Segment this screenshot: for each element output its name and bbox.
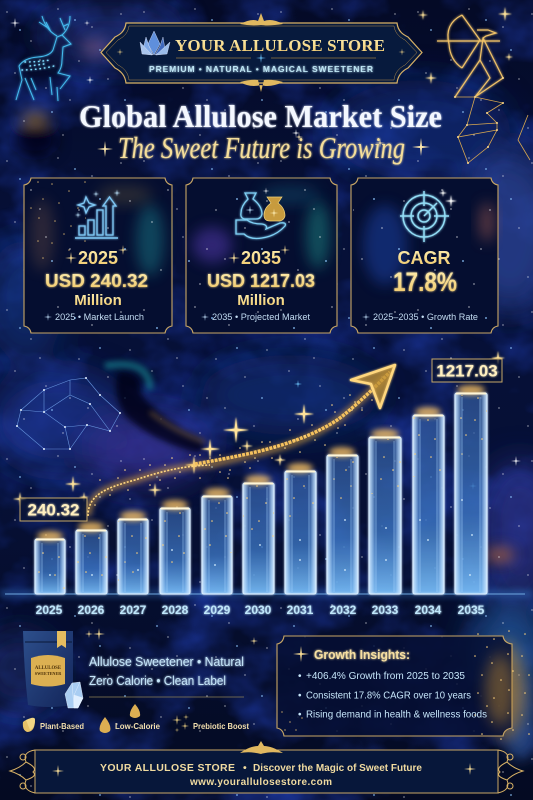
bar: 2029 bbox=[202, 488, 232, 594]
ornament: right scroll bbox=[498, 750, 523, 793]
year labels: 2026 bbox=[78, 603, 105, 617]
label: 240.32: 240.32 bbox=[28, 500, 80, 520]
ornament: bottom flourish bbox=[240, 80, 283, 92]
badge: prebiotic boost bbox=[172, 714, 249, 732]
bar: 2034 bbox=[413, 407, 444, 594]
bar: 2031 bbox=[285, 463, 316, 594]
bar: 2028 bbox=[160, 500, 190, 594]
insight bullets bbox=[298, 671, 487, 720]
badge: low-calorie: Low-Calorie bbox=[115, 721, 160, 731]
insight bullets: • bbox=[298, 690, 302, 702]
panel: 2025 market size bbox=[24, 178, 172, 333]
insight bullets: • bbox=[298, 671, 302, 682]
icon: archer constellation bbox=[437, 15, 530, 163]
year labels: 2034 bbox=[415, 603, 442, 617]
bar: 2027 bbox=[118, 511, 148, 594]
ribbon bbox=[57, 631, 66, 648]
badge: plant-based: Plant-Based bbox=[40, 721, 84, 731]
sparkle stars bbox=[10, 18, 521, 490]
icon: deer constellation bbox=[16, 16, 71, 101]
bar: 2033 bbox=[369, 429, 401, 594]
tagline: PREMIUM • NATURAL • MAGICAL SWEETENER bbox=[149, 64, 373, 74]
pouch label: SWEETENER bbox=[35, 671, 62, 676]
bar: 2032 bbox=[327, 447, 358, 594]
icon: money bags in hand bbox=[236, 188, 285, 238]
chart: market size bars 2025–2035 bbox=[0, 385, 533, 617]
year labels: 2028 bbox=[162, 603, 189, 617]
arrow: golden growth trend bbox=[88, 365, 395, 516]
ornament: top flourish bbox=[240, 741, 283, 754]
year labels: 2027 bbox=[120, 603, 147, 617]
pouch label: ALLULOSE bbox=[35, 666, 61, 671]
year labels: 2032 bbox=[330, 603, 357, 617]
panel: CAGR bbox=[351, 178, 498, 333]
value: 17.8%: 17.8% bbox=[393, 267, 457, 297]
caption: 2035 • Projected Market bbox=[212, 312, 311, 322]
icon: sparkle bbox=[293, 646, 309, 662]
icon: rising bars bbox=[75, 190, 120, 238]
text block: product attributes: Zero Calorie • Clean Label bbox=[89, 674, 226, 688]
badge: low-calorie bbox=[100, 704, 160, 733]
bar: 2030 bbox=[243, 475, 274, 594]
chart axis bbox=[0, 589, 533, 598]
insight bullets: • bbox=[298, 710, 302, 720]
footer tagline bbox=[100, 762, 422, 774]
nebula cloud and net constellation bbox=[17, 364, 205, 452]
text block: product attributes bbox=[89, 655, 244, 688]
year labels bbox=[36, 603, 485, 617]
icon: crystal bbox=[65, 682, 83, 708]
year labels: 2025 bbox=[36, 603, 63, 617]
ornament: left scroll bbox=[10, 750, 35, 793]
year labels: 2035 bbox=[458, 603, 485, 617]
icon: crystal logo bbox=[140, 31, 170, 55]
bar: 2025 bbox=[35, 531, 65, 594]
footer tagline: YOUR ALLULOSE STORE bbox=[100, 762, 235, 774]
label: year: 2035 bbox=[241, 248, 281, 268]
footer url: www.yourallulosestore.com bbox=[189, 777, 332, 788]
label: year: 2025 bbox=[78, 248, 118, 268]
badge: prebiotic boost: Prebiotic Boost bbox=[193, 721, 249, 731]
caption: 2025 • Market Launch bbox=[55, 312, 144, 322]
feature badges bbox=[23, 704, 249, 733]
icon: target bbox=[400, 189, 457, 242]
panel: growth insights bbox=[277, 628, 533, 740]
heading: store name: YOUR ALLULOSE STORE bbox=[175, 36, 385, 55]
year labels: 2031 bbox=[287, 603, 314, 617]
text block: product attributes: Allulose Sweetener • Natural bbox=[89, 655, 244, 669]
year labels: 2029 bbox=[204, 603, 231, 617]
year labels: 2030 bbox=[245, 603, 272, 617]
label: 1217.03: 1217.03 bbox=[436, 362, 498, 380]
label: unit: Million bbox=[74, 292, 122, 309]
ornament: top flourish bbox=[240, 13, 283, 25]
footer tagline: Discover the Magic of Sweet Future bbox=[253, 762, 422, 774]
badge: plant-based bbox=[23, 718, 84, 732]
header plaque bbox=[101, 13, 422, 92]
subtitle: The Sweet Future is Growing bbox=[118, 130, 405, 165]
year labels: 2033 bbox=[372, 603, 399, 617]
label: 240.32 bbox=[20, 498, 87, 521]
insight bullets: +406.4% Growth from 2025 to 2035 bbox=[306, 671, 465, 682]
bar: 2026 bbox=[76, 522, 107, 594]
footer tagline: • bbox=[243, 762, 247, 774]
value: USD 240.32: USD 240.32 bbox=[45, 270, 148, 291]
value: USD 1217.03: USD 1217.03 bbox=[207, 270, 315, 291]
pouch label bbox=[31, 655, 65, 686]
gold sparkle band bbox=[474, 628, 533, 740]
label: CAGR: CAGR bbox=[398, 248, 450, 268]
heading: Growth Insights: bbox=[314, 647, 410, 662]
caption: 2025–2035 • Growth Rate bbox=[373, 312, 478, 322]
bar: 2035 bbox=[455, 385, 487, 594]
insight bullets: Consistent 17.8% CAGR over 10 years bbox=[306, 690, 471, 702]
insight bullets: Rising demand in health & wellness foods bbox=[306, 710, 487, 720]
bar sparkles bbox=[50, 500, 472, 575]
panel: 2035 market size bbox=[186, 178, 337, 333]
footer banner bbox=[10, 741, 523, 793]
product: allulose pouch bbox=[23, 628, 258, 708]
label: unit: Million bbox=[237, 292, 285, 309]
title: Global Allulose Market Size bbox=[79, 98, 442, 134]
